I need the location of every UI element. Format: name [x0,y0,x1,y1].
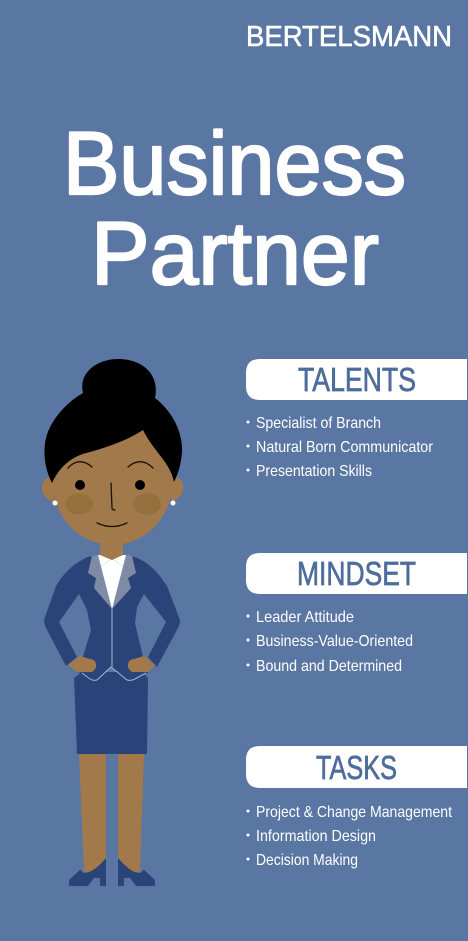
jacket seams [82,609,146,680]
list: Information Design [256,828,376,845]
list [246,415,434,480]
skirt [74,672,148,754]
shirt [98,555,126,609]
cheeks [65,494,161,514]
title [63,113,406,303]
hair [44,359,182,483]
heading: TALENTS [298,361,416,398]
list: Bound and Determined [256,658,402,675]
ears [42,476,183,502]
list [246,804,452,869]
list: Decision Making [256,852,358,869]
jacket [44,555,180,681]
list: Presentation Skills [256,463,372,480]
panel: mindset [246,553,467,675]
collar lines [101,559,123,566]
logo: Bertelsmann: BERTELSMANN [246,21,452,53]
list: Business-Value-Oriented [256,633,413,650]
title: Partner [91,203,379,303]
heading [246,359,467,400]
list: Leader Attitude [256,609,354,626]
neck [100,540,123,560]
heading: TASKS [316,749,397,786]
illustration: businesswoman [42,359,183,886]
panel: talents [246,359,467,480]
brows, nose, mouth [68,462,153,526]
hands [68,656,155,672]
lapels [88,555,136,609]
title: Business [63,113,406,213]
legs [79,754,144,872]
panel: tasks [246,746,467,869]
list: Specialist of Branch [256,415,381,432]
list: Natural Born Communicator [256,439,434,456]
heading [246,746,467,788]
heading [246,553,467,594]
face [52,415,173,545]
shoes [69,858,155,886]
heading: MINDSET [297,555,416,592]
eyes [75,480,145,490]
list [246,609,413,675]
earrings [52,500,176,506]
